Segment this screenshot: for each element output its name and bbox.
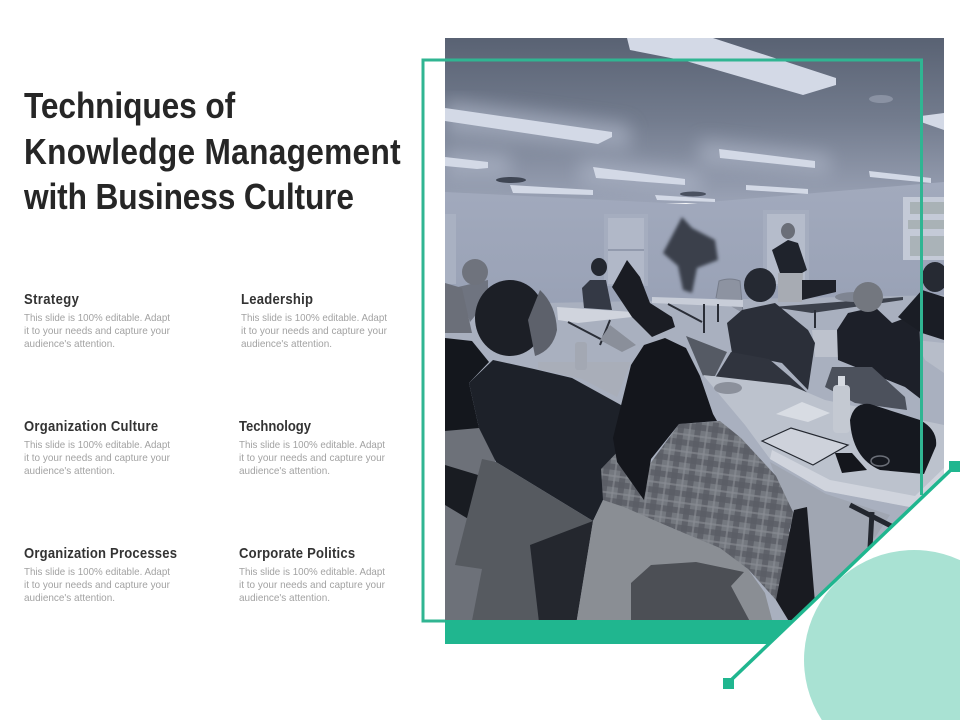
text block: Organization Culture: Organization Culture [24,418,158,434]
presenter [772,223,807,302]
back tables and laptop [557,280,903,345]
text block: Organization Processes [24,545,177,604]
text block: Corporate Politics [239,545,386,604]
long table [703,375,944,508]
floor under table [770,462,890,600]
text block: Leadership: audience's attention. [241,339,332,350]
far man in dark suit [727,268,815,390]
left edge floor and chair [445,425,495,620]
title: Techniques of [24,86,236,126]
text block: Strategy: audience's attention. [24,339,115,350]
table behind left of right woman [812,330,838,357]
ceiling [445,38,944,203]
text block: Strategy: This slide is 100% editable. Adapt [24,313,170,324]
folding chair at back [716,279,743,313]
right woman and man [837,262,948,400]
text block: Strategy [24,291,171,350]
text block: Organization Processes: This slide is 100% editable. Adapt [24,567,170,578]
old man at back left [458,259,488,322]
text block: Leadership: This slide is 100% editable. Adapt [241,313,387,324]
text block: Strategy: it to your needs and capture your [24,326,171,337]
chair by bag [825,367,907,410]
text block: Technology [239,418,386,477]
text block: Organization Culture: it to your needs and capture your [24,453,171,464]
accent bar under photo [445,620,794,644]
decorative circle [804,550,960,720]
plant [663,217,718,293]
projection screen [903,197,944,260]
floor [445,295,944,620]
text block: Corporate Politics: audience's attention. [239,593,330,604]
text block: Leadership: it to your needs and capture your [241,326,388,337]
text block: Organization Culture: This slide is 100% editable. Adapt [24,440,170,451]
connector endpoint bottom left [723,678,734,689]
text block: Leadership [241,291,388,350]
text block: Organization Processes: it to your needs and capture your [24,580,171,591]
title [23,86,401,217]
text block: Organization Culture [24,418,171,477]
text block: Technology: Technology [239,418,311,434]
photo: audience in a meeting room [445,38,948,631]
wall [445,182,944,303]
chairs [686,336,810,395]
text block: Leadership: Leadership [241,291,313,307]
couple at back [582,258,675,352]
woman in plaid shirt [601,338,815,628]
man in dark sweater [469,280,630,521]
text block: Technology: audience's attention. [239,466,330,477]
connector endpoint top right [949,461,960,472]
middle table foreground left [538,362,631,397]
papers and bottle [714,376,850,465]
text block: Organization Culture: audience's attention. [24,466,115,477]
text block: Strategy: Strategy [24,291,79,307]
text block: Technology: it to your needs and capture your [239,453,386,464]
left edge person [445,283,489,431]
text block: Organization Processes: audience's attention. [24,593,115,604]
right side table [923,341,944,373]
title: Knowledge Management [24,132,401,172]
windows and door [445,210,809,286]
text block: Organization Processes: Organization Processes [24,545,177,561]
right jacket [576,500,772,620]
ceiling lights [445,38,944,202]
bottle on left table [575,342,587,362]
title: with Business Culture [23,177,354,217]
diagonal connector line [728,466,955,683]
text block: Technology: This slide is 100% editable. Adapt [239,440,385,451]
text block: Corporate Politics: it to your needs and capture your [239,580,386,591]
text block: Corporate Politics: This slide is 100% editable. Adapt [239,567,385,578]
text block: Corporate Politics: Corporate Politics [239,545,355,561]
handbag and phone [835,404,936,474]
left jacket [455,459,593,631]
teal frame [423,60,922,621]
